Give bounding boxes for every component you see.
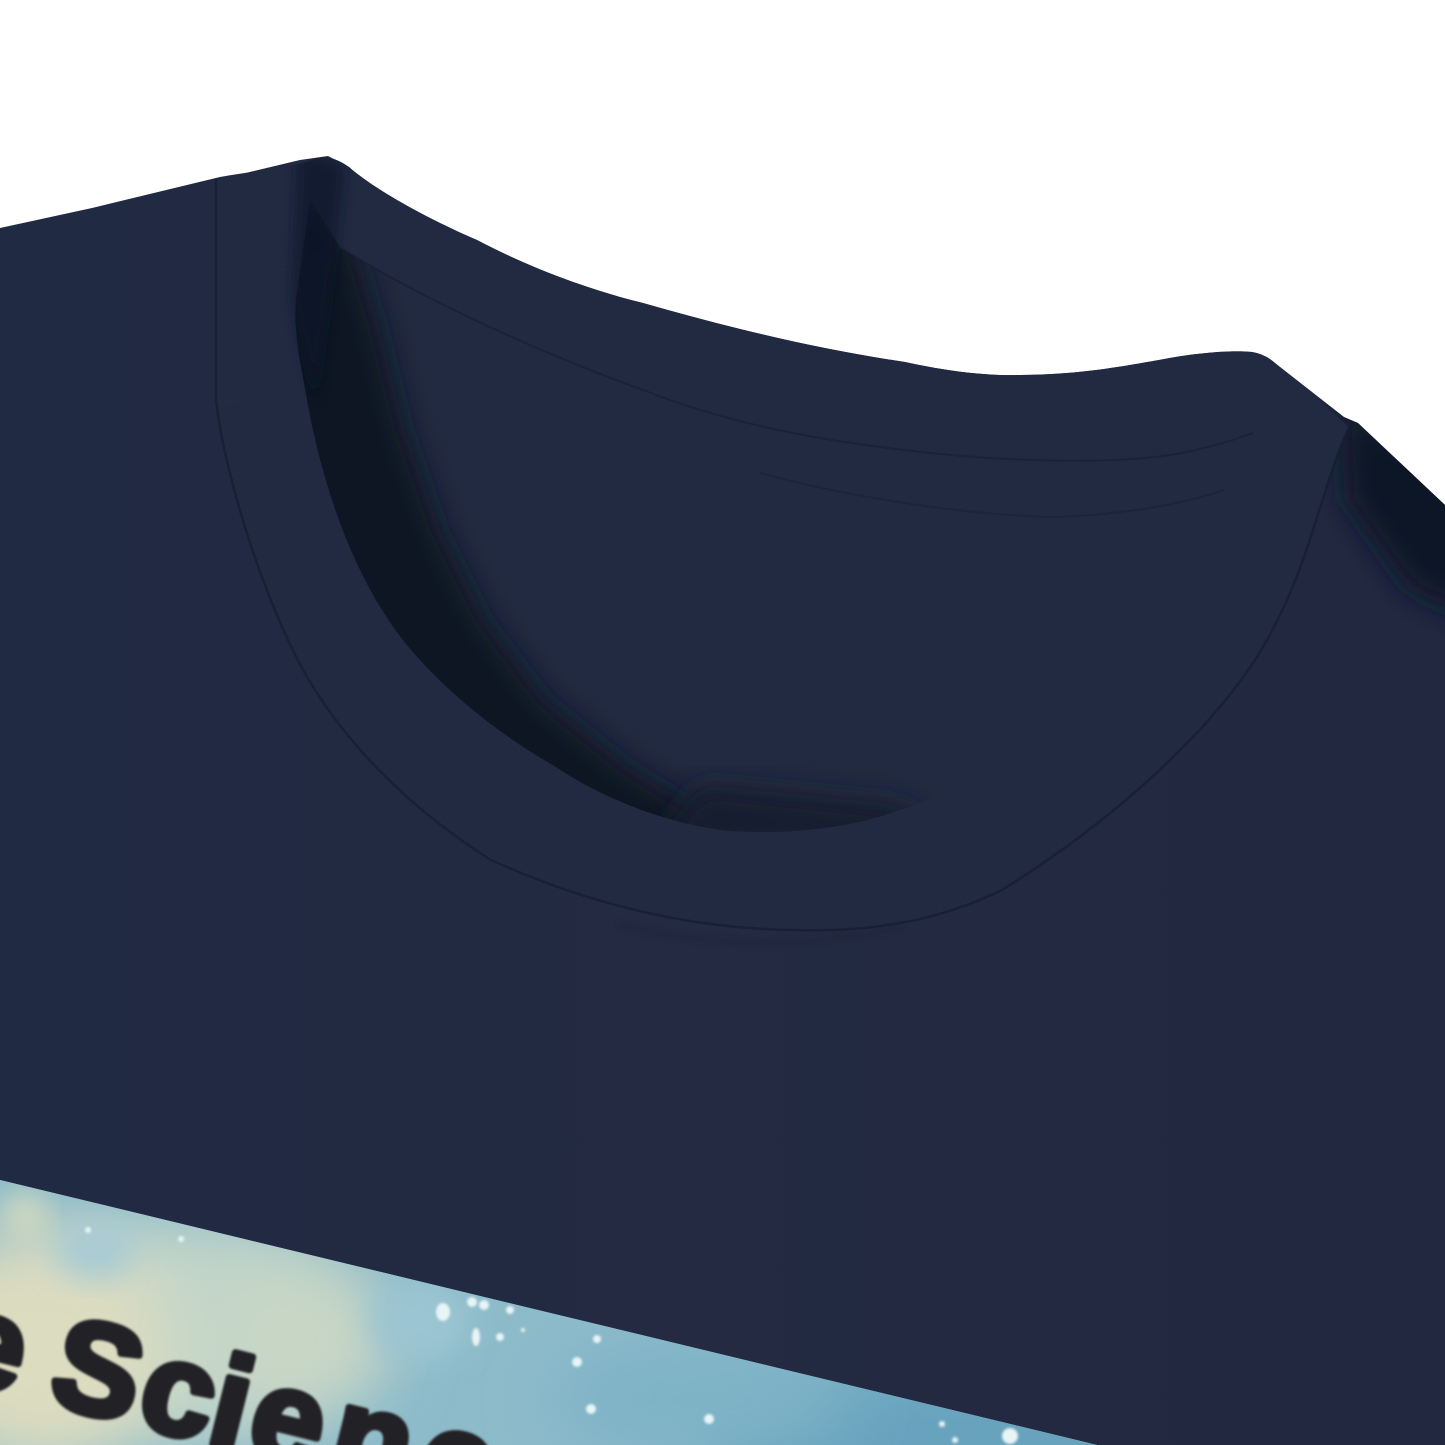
sleeve shadow on the right shoulder (1340, 400, 1445, 620)
rib texture (255, 180, 1310, 883)
neck interior shadow (296, 210, 904, 832)
printed graphic panel (0, 1180, 1097, 1445)
collar rib band and back rib (244, 156, 1348, 484)
collar seam lines (216, 180, 1349, 942)
collar top-corner shadow (290, 158, 346, 326)
print watercolor background (0, 1180, 1097, 1445)
white splatter dots (85, 1227, 1018, 1444)
neck interior (295, 206, 914, 832)
